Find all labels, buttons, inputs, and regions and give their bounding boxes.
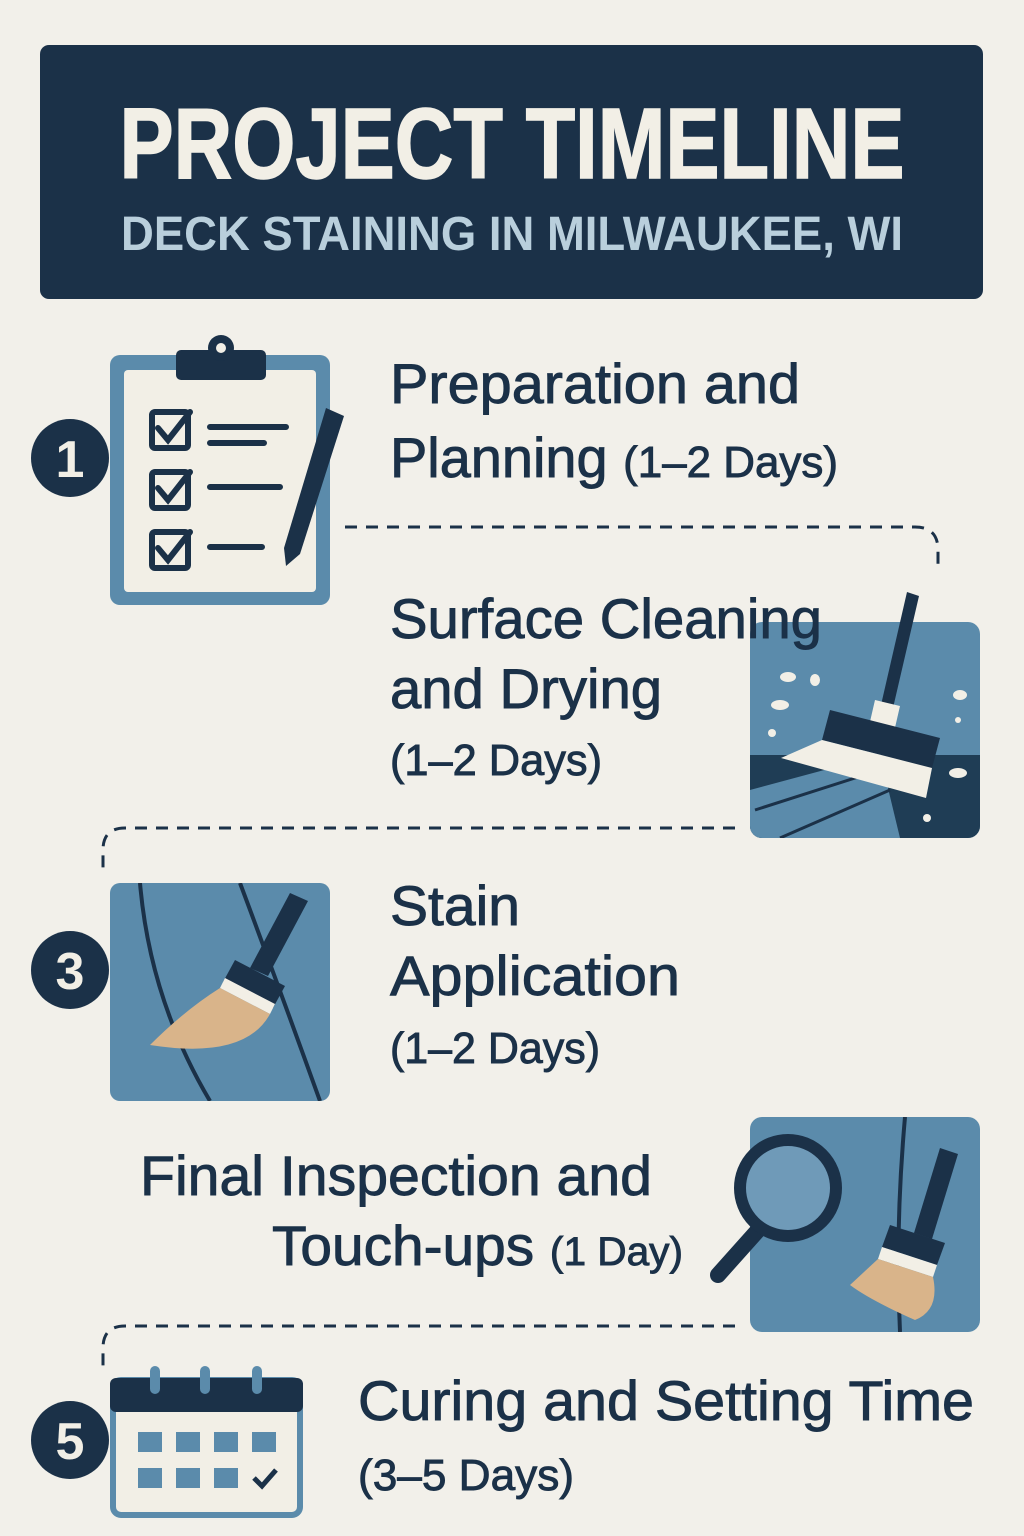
- step 4: [140, 1117, 980, 1332]
- badge 1: [31, 419, 109, 497]
- step 2: [390, 587, 980, 838]
- text 3: Application: [390, 944, 680, 1007]
- step 1: [31, 335, 838, 605]
- text 5: Curing and Setting Time: [358, 1369, 974, 1432]
- connector 4-5: [103, 1326, 735, 1366]
- text 3: (1–2 Days): [390, 1024, 600, 1073]
- text 2: (1–2 Days): [390, 736, 602, 785]
- badge 5: [31, 1401, 109, 1479]
- connector 2-3: [103, 828, 735, 868]
- step 3: [31, 874, 680, 1101]
- text 3: Stain: [390, 874, 520, 937]
- text 5: [358, 1369, 974, 1500]
- text 2: [390, 587, 822, 785]
- badge 1: 1: [56, 431, 84, 489]
- badge 3: 3: [56, 943, 84, 1001]
- text 1: Preparation and: [390, 352, 800, 415]
- icon: clipboard: [110, 335, 344, 605]
- badge 5: 5: [56, 1413, 84, 1471]
- badge 3: [31, 931, 109, 1009]
- text 2: and Drying: [390, 657, 662, 720]
- text 4: Touch-ups (1 Day): [272, 1214, 683, 1277]
- step 5: [31, 1366, 974, 1515]
- text 5: (3–5 Days): [358, 1451, 574, 1500]
- icon: calendar: [110, 1366, 303, 1515]
- subtitle: DECK STAINING IN MILWAUKEE, WI: [121, 208, 903, 261]
- icon: broom: [750, 592, 980, 838]
- text 1: Planning (1–2 Days): [390, 426, 838, 489]
- text 2: Surface Cleaning: [390, 587, 822, 650]
- header banner: [40, 45, 983, 299]
- text 3: [390, 874, 680, 1073]
- text 4: Final Inspection and: [140, 1144, 652, 1207]
- text 1: [390, 352, 838, 489]
- icon: magnifier and brush: [718, 1117, 980, 1332]
- text 4: [140, 1144, 683, 1277]
- connector 1-2: [345, 527, 938, 568]
- icon: brush on wood: [110, 883, 330, 1101]
